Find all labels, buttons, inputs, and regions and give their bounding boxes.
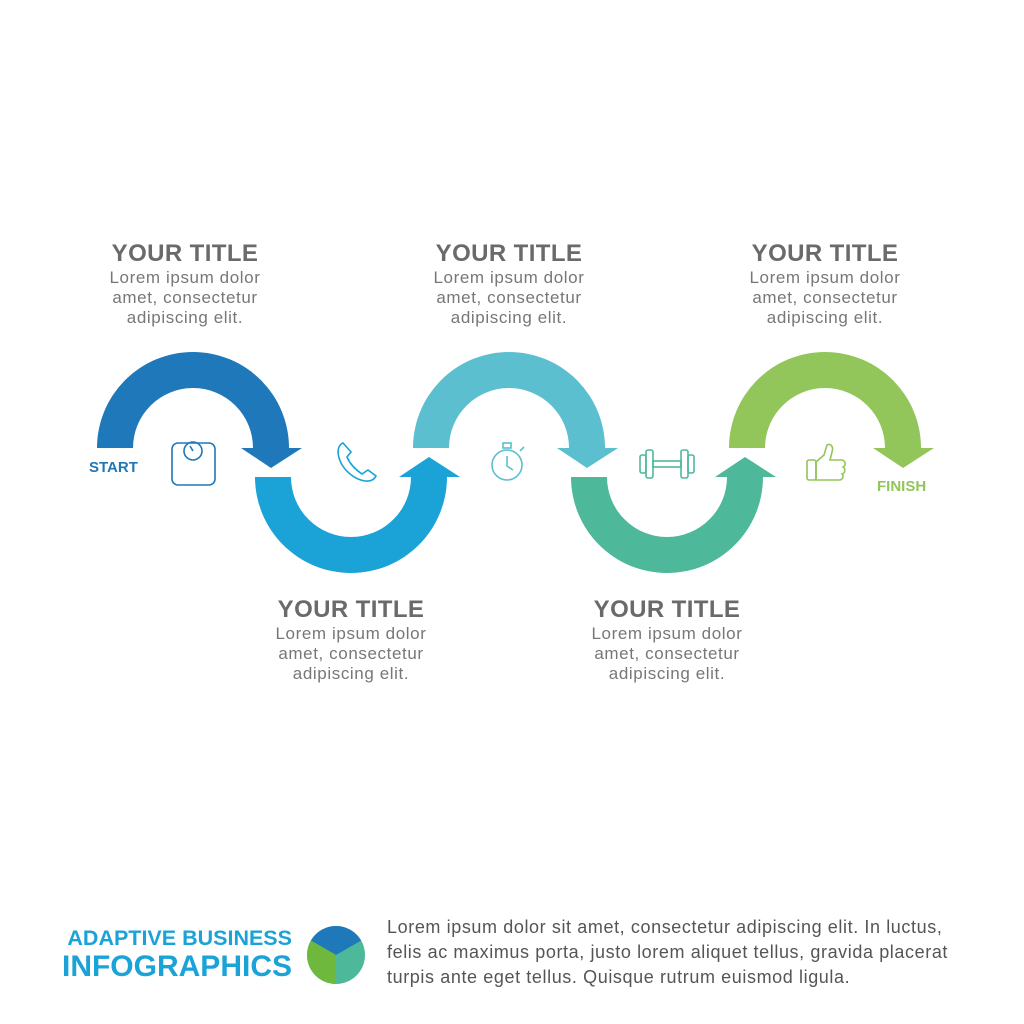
text block 2: amet, consectetur (278, 644, 424, 663)
footer paragraph: turpis ante eget tellus. Quisque rutrum euismod ligula. (387, 967, 850, 987)
text block 4: amet, consectetur (594, 644, 740, 663)
text block 5: Lorem ipsum dolor (750, 268, 900, 287)
icon: thumbs up (807, 444, 845, 480)
icon: scale (172, 442, 215, 485)
text block 2: YOUR TITLE (278, 596, 424, 623)
text block 4: Lorem ipsum dolor (592, 624, 742, 643)
text block 5: adipiscing elit. (767, 308, 883, 327)
text block 1: adipiscing elit. (127, 308, 243, 327)
footer paragraph: felis ac maximus porta, justo lorem aliquet tellus, gravida placerat (387, 942, 948, 962)
text block 3: Lorem ipsum dolor (434, 268, 584, 287)
text block 4: adipiscing elit. (609, 664, 725, 683)
footer paragraph (387, 917, 948, 987)
text block 1: amet, consectetur (112, 288, 258, 307)
footer title: ADAPTIVE BUSINESS (67, 926, 292, 950)
text block 3: YOUR TITLE (436, 240, 582, 267)
text block 2: Lorem ipsum dolor (276, 624, 426, 643)
text block 1: Lorem ipsum dolor (110, 268, 260, 287)
text block 2 (276, 596, 426, 683)
arc 4 (571, 457, 776, 573)
text block 3 (434, 240, 584, 327)
text block 5: amet, consectetur (752, 288, 898, 307)
text block 1: YOUR TITLE (112, 240, 258, 267)
text block 1 (110, 240, 260, 327)
arc 2 (255, 457, 460, 573)
arc 3 (413, 352, 618, 468)
arc 5 (729, 352, 934, 468)
icon: phone (338, 443, 376, 481)
text block 4: YOUR TITLE (594, 596, 740, 623)
icon: dumbbell (640, 450, 694, 478)
footer paragraph: Lorem ipsum dolor sit amet, consectetur adipiscing elit. In luctus, (387, 917, 942, 937)
text block 3: amet, consectetur (436, 288, 582, 307)
label: finish: FINISH (877, 478, 926, 495)
label: start: START (89, 459, 138, 476)
arc 1 (97, 352, 302, 468)
text block 3: adipiscing elit. (451, 308, 567, 327)
logo circle (307, 926, 365, 984)
text block 2: adipiscing elit. (293, 664, 409, 683)
footer title: INFOGRAPHICS (62, 950, 292, 983)
text block 5: YOUR TITLE (752, 240, 898, 267)
icon: stopwatch (492, 443, 524, 480)
text block 4 (592, 596, 742, 683)
footer title (62, 926, 292, 983)
text block 5 (750, 240, 900, 327)
